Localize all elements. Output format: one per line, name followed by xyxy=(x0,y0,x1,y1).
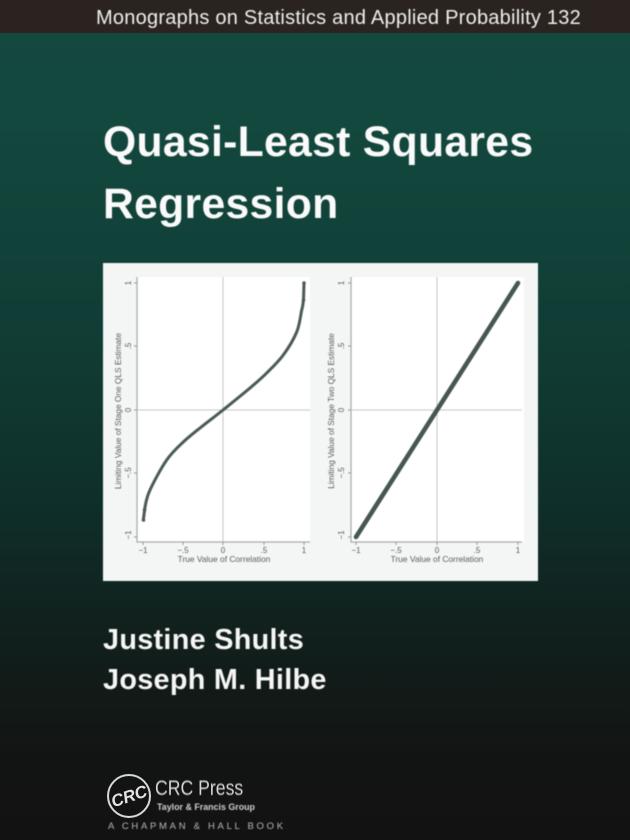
authors: Joseph M. Hilbe xyxy=(103,664,327,696)
left chart: stage one estimate: .5 xyxy=(124,342,133,349)
imprint line: A CHAPMAN & HALL BOOK xyxy=(108,821,286,832)
publisher logo xyxy=(107,774,286,832)
right chart: stage two estimate: −.5 xyxy=(390,546,402,555)
book title: Quasi-Least Squares xyxy=(103,118,533,166)
book title xyxy=(103,118,533,228)
right chart: stage two estimate: 1 xyxy=(516,546,521,555)
right chart: stage two estimate: −.5 xyxy=(337,467,346,479)
left chart: stage one estimate: −1 xyxy=(138,546,148,555)
icon: CRC circle xyxy=(107,774,151,818)
right chart: stage two estimate: True Value of Correlation xyxy=(391,554,484,564)
right chart: stage two estimate: 0 xyxy=(435,546,440,555)
left chart: stage one estimate: −.5 xyxy=(177,546,189,555)
series banner xyxy=(0,0,630,33)
left chart: stage one estimate xyxy=(113,277,310,564)
publisher group: Taylor & Francis Group xyxy=(157,802,255,812)
left chart: stage one estimate: 0 xyxy=(124,407,133,412)
left chart: stage one estimate: 1 xyxy=(302,546,307,555)
left chart: stage one estimate: 0 xyxy=(221,546,226,555)
right chart: stage two estimate: Limiting Value of Stage Two QLS Estimate xyxy=(326,333,336,489)
chart panel xyxy=(102,262,539,582)
book title: Regression xyxy=(103,180,338,228)
right chart: stage two estimate: 0 xyxy=(337,407,346,412)
right chart: stage two estimate: −1 xyxy=(351,546,361,555)
right chart: stage two estimate: .5 xyxy=(474,546,481,555)
left chart: stage one estimate: 1 xyxy=(124,280,133,285)
right chart: stage two estimate: .5 xyxy=(337,342,346,349)
authors: Justine Shults xyxy=(103,624,304,656)
publisher name: CRC Press xyxy=(155,777,243,800)
authors xyxy=(102,624,327,696)
left chart: stage one estimate: .5 xyxy=(261,546,268,555)
right chart: stage two estimate: −1 xyxy=(337,530,346,540)
left chart: stage one estimate: True Value of Correlation xyxy=(178,554,271,564)
left chart: stage one estimate: −.5 xyxy=(124,467,133,479)
left chart: stage one estimate: −1 xyxy=(124,530,133,540)
right chart: stage two estimate xyxy=(326,277,524,564)
series title: Monographs on Statistics and Applied Probability 132 xyxy=(96,7,581,29)
icon: CRC circle: CRC xyxy=(109,782,150,811)
left chart: stage one estimate: Limiting Value of Stage One QLS Estimate xyxy=(113,333,123,489)
right chart: stage two estimate: 1 xyxy=(337,280,346,285)
